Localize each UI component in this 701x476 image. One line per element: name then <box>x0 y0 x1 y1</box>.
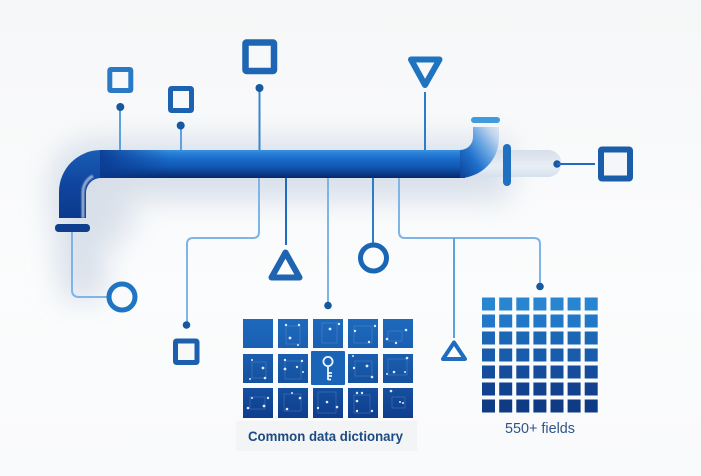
top flange <box>471 117 500 123</box>
label: 550+ fields: 550+ fields <box>505 421 575 437</box>
right elbow <box>460 127 499 178</box>
outlet flange <box>503 144 511 186</box>
connector: large square <box>246 42 274 150</box>
label: common data dictionary: Common data dictionary <box>248 429 403 444</box>
label: common data dictionary <box>236 421 417 451</box>
icon: square 2 <box>170 88 192 110</box>
horizontal section <box>100 150 465 178</box>
connector and circle middle <box>360 178 386 271</box>
icon: small triangle <box>443 342 465 359</box>
cell circuit traces <box>250 323 407 413</box>
icon: circle middle <box>360 245 386 271</box>
pipe shadow <box>50 140 510 300</box>
connector and square lower left <box>176 178 259 362</box>
icon: triangle <box>272 252 300 278</box>
pale outlet pipe <box>480 144 562 186</box>
550+ fields grid <box>482 298 598 412</box>
main pipe <box>55 117 500 232</box>
connector: square top left <box>110 70 131 150</box>
icon: lower square <box>176 341 197 362</box>
connector: square second <box>170 88 192 150</box>
icon: square 1 <box>110 70 131 90</box>
cell dots <box>247 323 408 412</box>
icon: key <box>323 357 333 380</box>
common data dictionary grid <box>243 319 413 418</box>
connector to fields and triangle <box>399 178 544 359</box>
connector and square at outlet <box>553 150 630 178</box>
connector and triangle <box>272 178 300 278</box>
icon: square 3 <box>246 42 274 71</box>
connector to dictionary <box>324 178 332 309</box>
icon: circle <box>109 284 135 310</box>
icon: inverted triangle <box>411 60 440 85</box>
bottom flange <box>55 224 90 232</box>
left elbow <box>59 150 112 218</box>
connector: inverted triangle <box>411 60 440 150</box>
infographic: data pipeline <box>40 39 633 444</box>
connector and circle bottom left <box>72 232 135 310</box>
icon: outlet square <box>601 150 630 178</box>
key cell <box>311 351 345 385</box>
